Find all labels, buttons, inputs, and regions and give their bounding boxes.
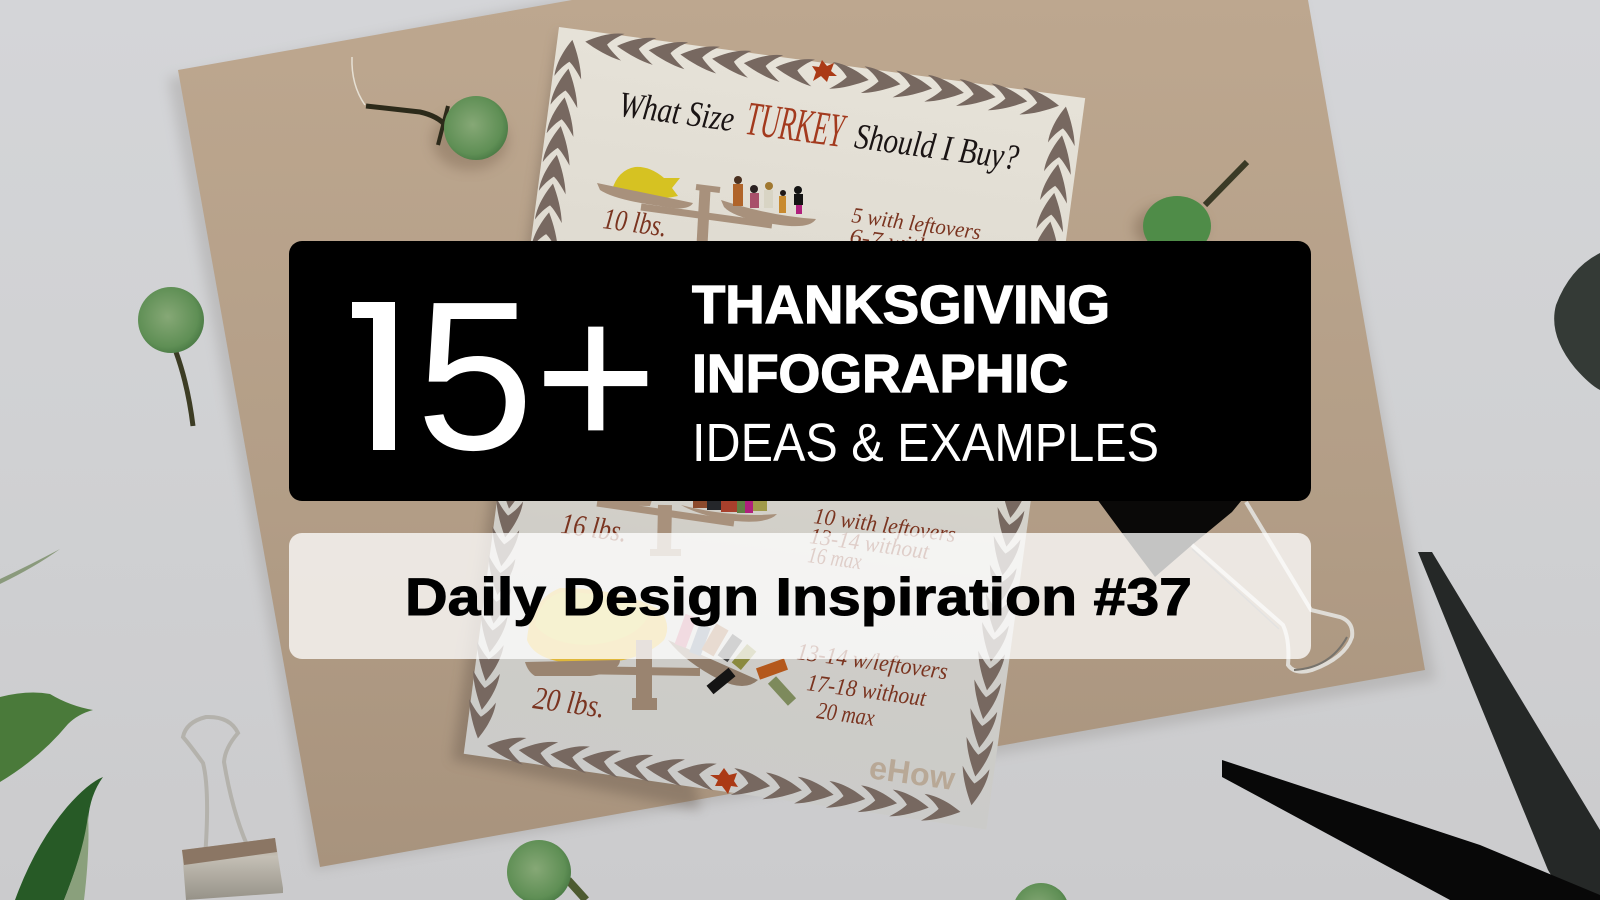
card title: Should I Buy? bbox=[852, 116, 1021, 178]
scissors: lower blade bbox=[1222, 760, 1600, 900]
chevron border bbox=[461, 25, 1082, 829]
card title: What Size bbox=[617, 84, 737, 139]
label: 13-14 w/leftovers: 13-14 w/leftovers bbox=[795, 639, 949, 685]
label: 17-18 without: 17-18 without bbox=[805, 670, 929, 712]
label: 16 lbs: 16 lbs. bbox=[559, 507, 629, 549]
leaf: thin sprig bbox=[0, 549, 60, 584]
leaf: lower bbox=[15, 777, 103, 900]
card title: TURKEY bbox=[743, 92, 849, 158]
heading: thanksgiving: THANKSGIVING bbox=[692, 275, 1110, 335]
scale: 16 lbs bbox=[597, 500, 777, 556]
label: 10 with leftovers: 10 with leftovers bbox=[812, 503, 957, 547]
green berry: bottom bbox=[507, 840, 586, 900]
small silver binder clip bbox=[182, 717, 283, 900]
title panel bbox=[289, 241, 1311, 501]
kraft paper sheet bbox=[168, 0, 1436, 870]
worksheet card bbox=[452, 25, 1085, 829]
big number: 5+ bbox=[416, 257, 658, 494]
scissors bbox=[1222, 552, 1600, 900]
label: 16 max: 16 max bbox=[806, 542, 864, 574]
subheading: IDEAS & EXAMPLES bbox=[692, 413, 1159, 473]
series panel bbox=[289, 533, 1311, 659]
star ornament top bbox=[812, 60, 837, 82]
binder clip handles bbox=[1192, 502, 1352, 672]
scissors: upper blade bbox=[1418, 552, 1600, 900]
label: 6-7 without: 6-7 without bbox=[848, 223, 964, 263]
label: 5 with leftovers: 5 with leftovers bbox=[850, 202, 983, 244]
star ornament bottom bbox=[710, 768, 738, 794]
label: 20 lbs: 20 lbs. bbox=[531, 679, 607, 725]
big number bbox=[352, 302, 648, 452]
stone bbox=[1554, 253, 1600, 390]
label: 20 max: 20 max bbox=[815, 698, 876, 732]
big number: 1 bbox=[320, 257, 438, 494]
green berry: left on background bbox=[138, 287, 204, 426]
green berry: bottom right bbox=[1013, 883, 1069, 900]
leaf: broad bbox=[0, 693, 93, 782]
scale: 10 lbs bbox=[597, 167, 816, 245]
green berry: top left on kraft bbox=[352, 57, 508, 170]
black binder clip bbox=[1094, 495, 1246, 577]
heading: infographic: INFOGRAPHIC bbox=[692, 344, 1068, 404]
scale: 20 lbs bbox=[525, 588, 792, 710]
series title: Daily Design Inspiration #37 bbox=[405, 568, 1192, 627]
logo: eHow: eHow bbox=[867, 749, 957, 797]
card title bbox=[616, 75, 1023, 182]
label: 13-14 without: 13-14 without bbox=[808, 523, 931, 564]
green berry: right on kraft bbox=[1134, 162, 1247, 256]
card paper bbox=[460, 27, 1085, 829]
label: 10 lbs: 10 lbs. bbox=[601, 202, 669, 244]
